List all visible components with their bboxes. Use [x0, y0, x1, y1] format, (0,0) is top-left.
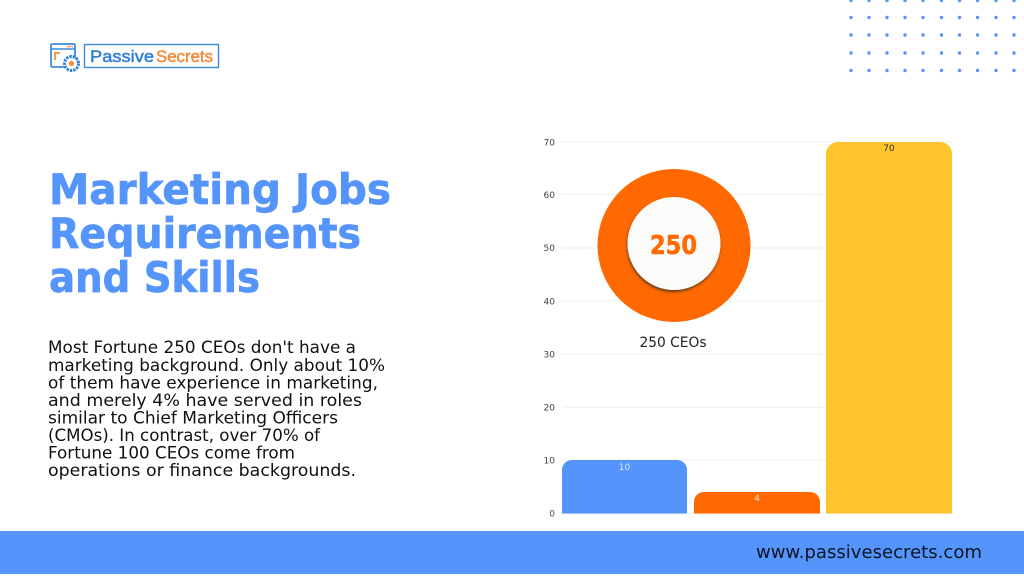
- chart y-axis labels: 0: [549, 510, 555, 520]
- body text: [48, 338, 385, 480]
- title: [49, 165, 391, 302]
- body text: of them have experience in marketing,: [48, 374, 378, 392]
- chart y-axis labels: 40: [544, 298, 555, 308]
- body text: Most Fortune 250 CEOs don't have a: [48, 338, 356, 357]
- logo: [51, 44, 218, 70]
- bar: 10: [562, 460, 687, 514]
- logo wordmark box: Secrets: [156, 47, 213, 66]
- chart y-axis labels: 50: [544, 244, 555, 254]
- body text: similar to Chief Marketing Officers: [48, 408, 338, 428]
- body text: Fortune 100 CEOs come from: [48, 444, 295, 462]
- title: Requirements: [49, 209, 361, 258]
- title: and Skills: [49, 253, 260, 302]
- chart y-axis labels: 30: [544, 350, 555, 360]
- logo wordmark box: [84, 44, 218, 68]
- chart y-axis labels: 60: [544, 191, 555, 201]
- chart gridlines: [562, 142, 952, 514]
- chart y-axis labels: [544, 138, 555, 520]
- body text: and merely 4% have served in roles: [48, 391, 362, 410]
- body text: operations or finance backgrounds.: [48, 461, 356, 480]
- donut centre: [628, 197, 720, 290]
- donut ring: [598, 169, 750, 322]
- logo wordmark box: Passive: [90, 47, 154, 66]
- body text: (CMOs). In contrast, over 70% of: [48, 426, 321, 445]
- decorative dot grid: [849, 0, 1016, 72]
- donut value: 250: [650, 231, 697, 261]
- website url: www.passivesecrets.com: [756, 542, 982, 563]
- icon: browser window with gear: [51, 44, 78, 70]
- bar: 10: 10: [619, 463, 630, 473]
- bar: 4: 4: [754, 494, 760, 504]
- chart y-axis labels: 10: [544, 456, 555, 466]
- body text: marketing background. Only about 10%: [48, 356, 385, 375]
- bar chart: [544, 138, 952, 520]
- title: Marketing Jobs: [49, 165, 391, 214]
- donut: 250 CEOs: [598, 169, 750, 351]
- footer band: [0, 531, 1024, 574]
- donut label: 250 CEOs: [640, 335, 706, 351]
- chart y-axis labels: 70: [544, 138, 555, 148]
- bar: 70: 70: [883, 144, 895, 154]
- bar: 70: [826, 142, 952, 514]
- chart y-axis labels: 20: [544, 404, 555, 414]
- bar: 4: [694, 492, 820, 514]
